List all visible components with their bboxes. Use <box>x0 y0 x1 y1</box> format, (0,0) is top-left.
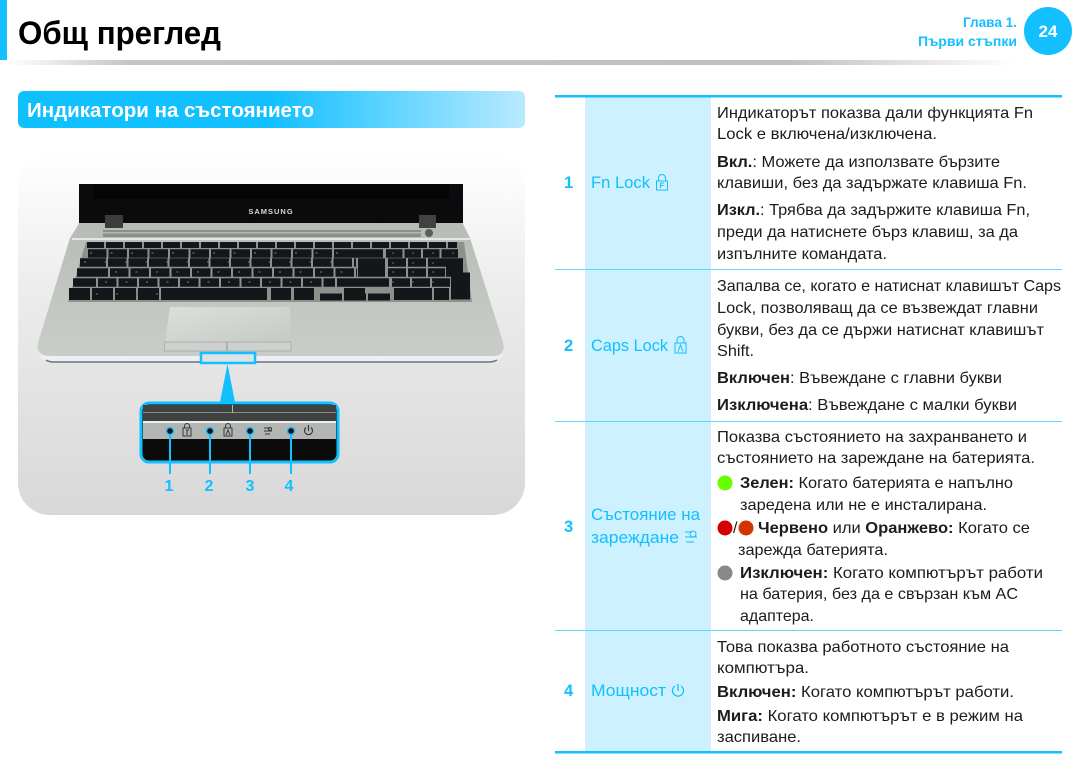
panel: laptop illustration <box>18 155 525 515</box>
row 4: power <box>564 639 1023 746</box>
row 1: Fn Lock: Вкл.: Можете да използвате бързите <box>717 154 1000 171</box>
icon: power <box>304 425 312 435</box>
highlight box on indicators <box>201 353 255 363</box>
row 3: charging status: Състояние на <box>591 506 701 524</box>
status dot: green <box>718 476 732 490</box>
icon: charge <box>264 428 272 434</box>
icon: Caps lock <box>675 336 686 353</box>
row 2: Caps Lock: букви, без да се държи натиснат клавишът <box>717 322 1045 339</box>
row 1: Fn Lock: преди да натиснете бърз клавиш, за да <box>717 224 1018 241</box>
row 3: charging status: зарежда батерията. <box>738 542 888 559</box>
chapter label: Глава 1. <box>963 15 1017 30</box>
page number badge <box>1024 7 1072 55</box>
row 3: charging status: Показва състоянието на захранването и <box>717 429 1027 446</box>
page number badge: 24 <box>1039 22 1058 41</box>
indicator numbers <box>165 478 294 495</box>
row 1: Fn Lock: Индикаторът показва дали функцията Fn <box>717 105 1033 122</box>
front edge <box>38 350 504 362</box>
icon: Fn lock <box>656 174 668 190</box>
row 2: Caps Lock: 2 <box>564 337 573 355</box>
label column band <box>585 97 711 752</box>
row 4: power: Това показва работното състояние на <box>717 639 1009 656</box>
row 4: power: заспиване. <box>717 729 801 746</box>
row 1: Fn Lock <box>564 105 1033 263</box>
row 3: charging status: на батерия, без да е свързан към AC <box>740 586 1018 603</box>
row 3: charging status: зареждане <box>591 529 679 547</box>
row 1: Fn Lock: изпълните командата. <box>717 246 887 263</box>
status dots: red and orange: / <box>733 520 738 537</box>
icon: lock A <box>224 424 232 436</box>
keyboard <box>68 242 472 302</box>
row 4: power: Включен: Когато компютърът работи. <box>717 684 1014 701</box>
row 3: charging status: 3 <box>564 518 573 536</box>
indicator numbers: 3 <box>246 478 255 495</box>
row 3: charging status: Изключен: Когато компютърът работи <box>740 565 1043 582</box>
row 1: Fn Lock: 1 <box>564 174 573 192</box>
row 3: charging status: Червено или Оранжево: Когато се <box>758 520 1030 537</box>
row 1: Fn Lock: Lock е включена/изключена. <box>717 126 937 143</box>
laptop: SAMSUNG <box>248 207 294 216</box>
laptop <box>38 184 504 362</box>
row 4: power: Мига: Когато компютърът е в режим на <box>717 708 1023 725</box>
icon: charging <box>685 531 697 542</box>
row 2: Caps Lock: Caps Lock <box>591 337 669 355</box>
row 2: Caps Lock: Lock, позволяващ да се възвеждат главни <box>717 300 1038 317</box>
row 2: Caps Lock: Включен: Въвеждане с главни букви <box>717 370 1002 387</box>
status dot: grey <box>718 566 732 580</box>
status dots: red and orange <box>718 520 754 537</box>
row 3: charging status: заредена или не е инсталирана. <box>740 497 987 514</box>
chapter label: Първи стъпки <box>918 34 1017 49</box>
row 1: Fn Lock: клавиши, без да задържате клавиша Fn. <box>717 175 1027 192</box>
indicator numbers: 1 <box>165 478 174 495</box>
row 4: power: 4 <box>564 682 574 700</box>
row 2: Caps Lock: Shift. <box>717 343 754 360</box>
row 3: charging status: Зелен: Когато батерията е напълно <box>740 475 1013 492</box>
title: Общ преглед <box>18 15 221 51</box>
row 3: charging status: състоянието на зареждане на батерията. <box>717 450 1035 467</box>
indicator LEDs <box>166 428 294 434</box>
row 2: Caps Lock: Запалва се, когато е натиснат клавишът Caps <box>717 278 1061 295</box>
row 1: Fn Lock: Fn Lock <box>591 174 651 192</box>
row 2: Caps Lock <box>564 278 1061 414</box>
row 1: Fn Lock: Изкл.: Трябва да задържите клавиша Fn, <box>717 202 1030 219</box>
callout arrow <box>220 364 235 402</box>
header shadow rule <box>7 60 1047 65</box>
indicator numbers: 4 <box>285 478 294 495</box>
callout: indicator close-up <box>141 403 338 462</box>
header accent bar <box>0 0 7 60</box>
icon: power <box>672 684 684 696</box>
row 3: charging status: адаптера. <box>740 608 814 625</box>
icon: lock F <box>183 424 191 436</box>
table: indicators <box>555 95 1062 754</box>
row 2: Caps Lock: Изключена: Въвеждане с малки букви <box>717 397 1017 414</box>
row 3: charging status <box>564 429 1043 625</box>
row 4: power: Мощност <box>591 682 666 700</box>
section heading bar <box>18 91 525 128</box>
section heading bar: Индикатори на състоянието <box>27 100 314 122</box>
indicator leader lines <box>170 431 291 474</box>
table rules <box>555 95 1062 754</box>
touchpad <box>164 307 291 351</box>
row 4: power: компютъра. <box>717 660 809 677</box>
indicator numbers: 2 <box>205 478 214 495</box>
chapter label <box>918 15 1017 49</box>
